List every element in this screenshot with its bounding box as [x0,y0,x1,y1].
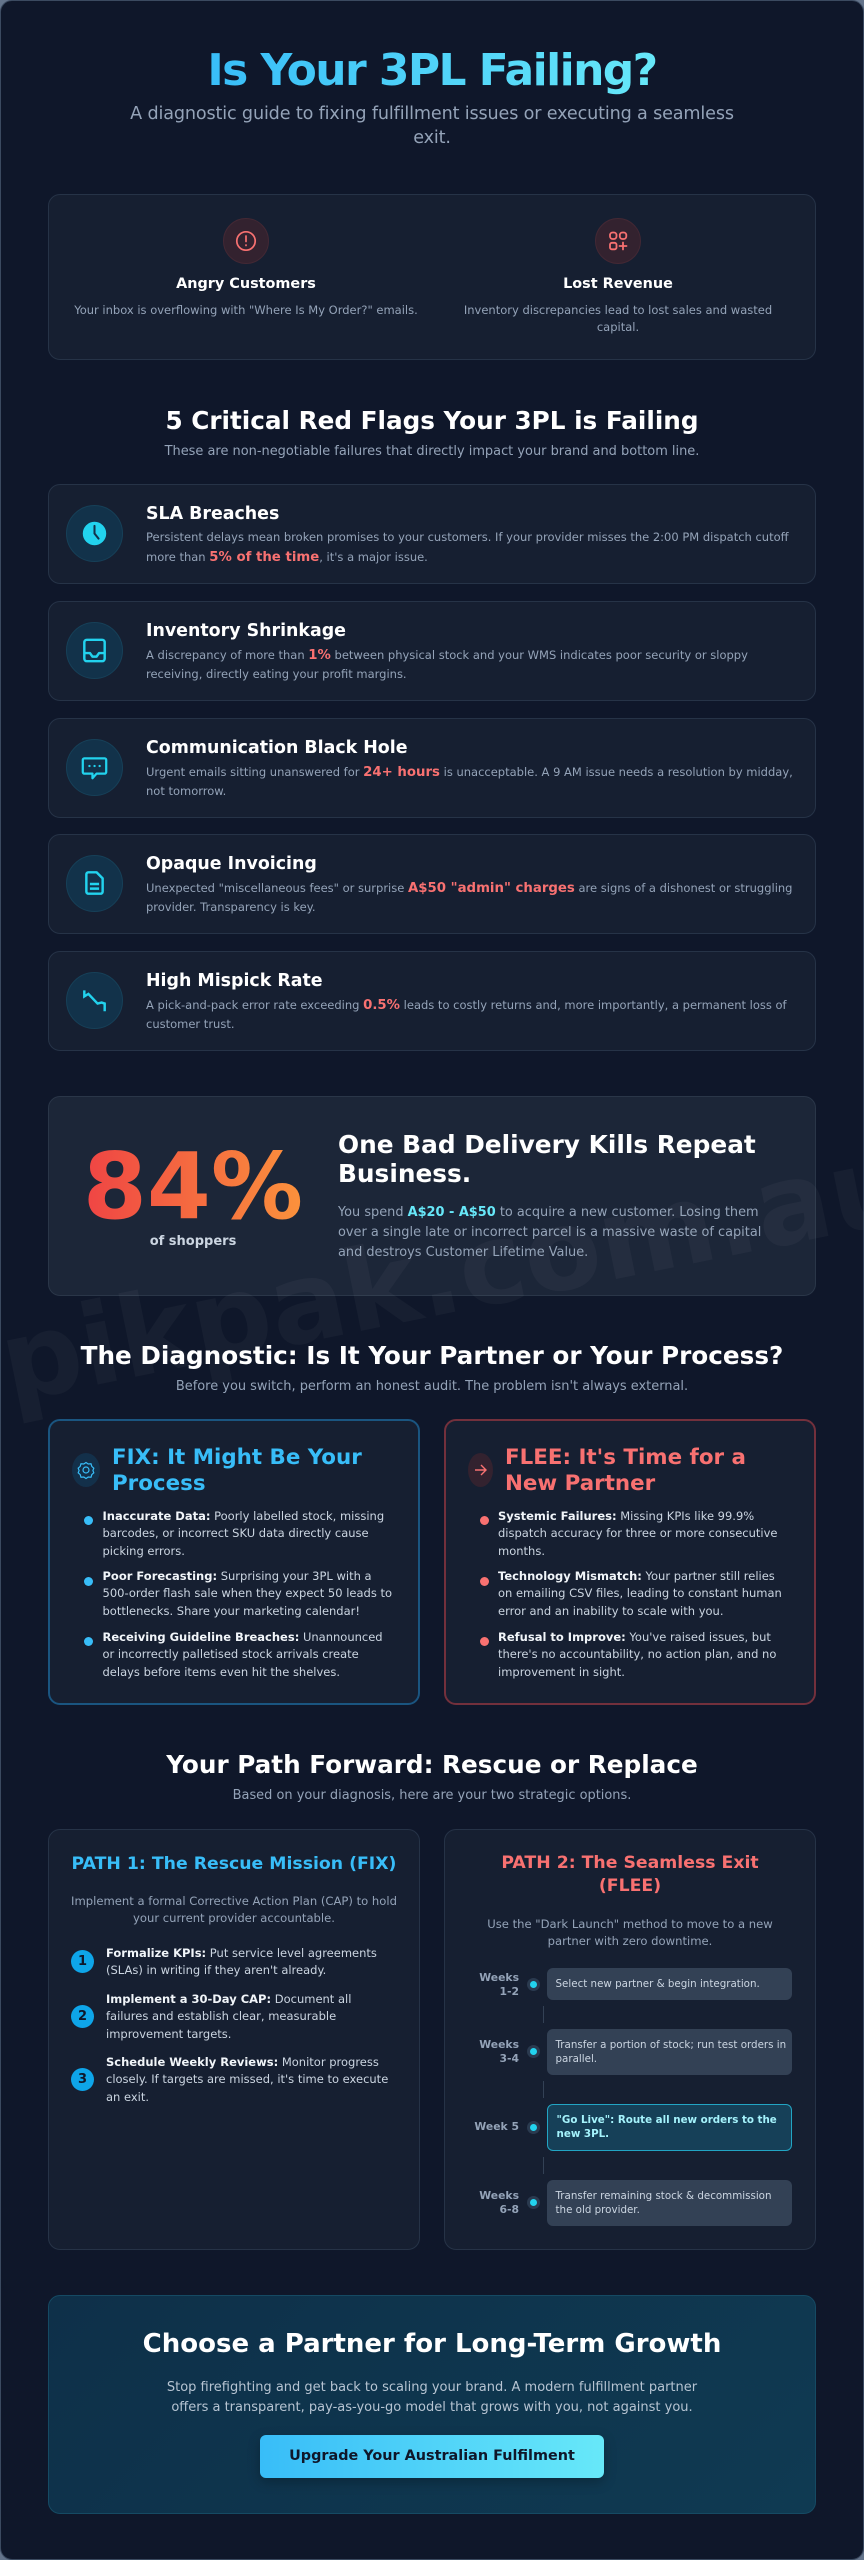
text: lost revenue: Inventory discrepancies lead to lost sales and wasted [464,303,772,317]
bullet: receiving guideline: or incorrectly palletised stock arrivals create [102,1647,359,1661]
bullet: systemic failures [498,1509,777,1558]
bullet: poor forecasting: 500-order flash sale when they expect 50 leads to [102,1586,392,1600]
label: weeks 3-4: 3-4 [499,2052,519,2065]
label: week 5: Week 5 [474,2120,519,2133]
heading: bad delivery: Business. [338,1159,471,1188]
text: communication black hole [146,765,793,798]
icon: shapes [595,218,641,264]
text: inventory shrinkage: A discrepancy of more than 1% between physical stock and your WMS indicates poor security or sloppy [146,648,748,663]
icon: alert circle [223,218,269,264]
bullet dot [480,1516,488,1525]
panel: high mispick rate [48,951,816,1051]
panel: consequences [48,194,816,360]
bullet: systemic failures: months. [498,1544,545,1558]
heading: bad delivery [338,1130,756,1188]
button: Upgrade Your Australian Fulfilment [289,2448,575,2464]
step 1 [71,1946,377,1977]
step: go live [547,2104,792,2151]
panel: path 1 [48,1829,420,2250]
step text: closely. If targets are missed, it's time to execute [106,2072,388,2086]
subtitle: exit. [413,128,451,148]
text: bad delivery [338,1205,761,1260]
heading: path forward: Your Path Forward: Rescue or Replace [166,1750,698,1779]
step number: 3 [78,2072,87,2087]
heading: opaque invoicing: Opaque Invoicing [146,854,317,874]
label: weeks 1-2: 1-2 [499,1985,519,1998]
text: communication black hole: not tomorrow. [146,784,226,798]
heading: inventory shrinkage: Inventory Shrinkage [146,621,346,641]
text: sla breaches [146,530,789,564]
title: Is Your 3PL Failing? [207,45,657,96]
bullet: systemic failures: dispatch accuracy for three or more consecutive [498,1526,777,1540]
heading: communication black hole: Communication Black Hole [146,738,408,758]
heading: flee [505,1445,746,1496]
bullet: inaccurate data: picking errors. [102,1544,185,1558]
text: path 1 intro: your current provider accountable. [133,1911,335,1925]
step text: Formalize KPIs: Put service level agreements [106,1946,377,1960]
step: transfer portion: parallel. [556,2053,597,2065]
heading: angry customers: Angry Customers [176,276,316,292]
bullet: poor forecasting: bottlenecks. Share your marketing calendar! [102,1604,360,1618]
panel: fix [48,1419,420,1705]
heading: path 2: (FLEE) [599,1876,661,1896]
bullet: technology mismatch: on emailing CSV files, leading to constant human [498,1586,782,1600]
text: high mispick rate: A pick-and-pack error rate exceeding 0.5% leads to costly returns and, more importantly, a permanent loss of [146,998,787,1013]
label: weeks 3-4 [479,2038,519,2065]
icon: chat bubble [66,739,123,796]
heading: fix: FIX: It Might Be Your [112,1445,362,1470]
step: decommission: the old provider. [556,2204,640,2216]
panel: sla breaches [48,484,816,584]
step number [71,1950,94,1972]
subheading: diagnostic: Before you switch, perform an honest audit. The problem isn't always external. [176,1379,688,1394]
text: inventory shrinkage [146,648,748,681]
text: bad delivery: You spend A$20 - A$50 to acquire a new customer. Losing them [338,1205,759,1220]
bullet dot [480,1637,488,1646]
heading: lost revenue: Lost Revenue [563,276,673,292]
bullet dot [84,1516,93,1525]
text: bad delivery: over a single late or incorrect parcel is a massive waste of capital [338,1225,761,1240]
heading: fix [112,1445,362,1496]
step: select partner: Select new partner & begin integration. [556,1978,760,1990]
text: path 1 intro: Implement a formal Corrective Action Plan (CAP) to hold [71,1894,397,1908]
bullet: systemic failures: Systemic Failures: Missing KPIs like 99.9% [498,1509,754,1523]
connector [543,2157,544,2174]
heading: diagnostic: The Diagnostic: Is It Your Partner or Your Process? [81,1341,783,1370]
step text: failures and establish clear, measurable [106,2009,336,2023]
text: lost revenue [464,303,772,334]
panel: opaque invoicing [48,834,816,934]
text: call to action: offers a transparent, pay-as-you-go model that grows with you, not against you. [171,2400,693,2415]
text: path 2 intro: Use the "Dark Launch" method to move to a new [487,1917,773,1931]
timeline [474,1968,792,2226]
bullet: refusal to improve: improvement in sight. [498,1665,625,1679]
bullet: refusal to improve: Refusal to Improve: You've raised issues, but [498,1630,771,1644]
step text [106,1992,351,2041]
step text: (SLAs) in writing if they aren't already. [106,1963,326,1977]
bullet: poor forecasting: Poor Forecasting: Surprising your 3PL with a [102,1569,372,1583]
bullet dot [84,1577,93,1586]
step: go live: new 3PL. [556,2128,609,2140]
text: high mispick rate: customer trust. [146,1017,234,1031]
button [260,2435,604,2478]
stat: 84 percent: 84% [83,1133,303,1240]
bullet list: fix [84,1509,392,1679]
bullet: receiving guideline [102,1630,383,1679]
subtitle: A diagnostic guide to fixing fulfillment issues or executing a seamless [130,104,734,124]
bullet: technology mismatch: Technology Mismatch: Your partner still relies [498,1569,775,1583]
panel: statistic [48,1096,816,1296]
bullet: inaccurate data: Inaccurate Data: Poorly labelled stock, missing [102,1509,384,1523]
panel: call to action [48,2295,816,2514]
label: weeks 3-4: Weeks [479,2038,519,2051]
text: path 2 intro: partner with zero downtime. [548,1934,712,1948]
step text: Implement a 30-Day CAP: Document all [106,1992,351,2006]
subheading: path forward: Based on your diagnosis, here are your two strategic options. [233,1788,631,1803]
panel: path 2 [444,1829,816,2250]
bullet: receiving guideline: delays before items even hit the shelves. [102,1665,340,1679]
bullet: refusal to improve: there's no accountability, no action plan, and no [498,1647,776,1661]
step 3 [71,2055,388,2104]
text: path 2 intro [487,1917,773,1948]
text: call to action: Stop firefighting and get back to scaling your brand. A modern fulfillment partner [167,2380,697,2395]
bullet list: flee [480,1509,782,1679]
bullet dot [480,1577,488,1586]
bullet: technology mismatch: error and an inability to scale with you. [498,1604,724,1618]
step: transfer portion: Transfer a portion of stock; run test orders in [556,2038,786,2050]
icon: gear [72,1453,100,1487]
timeline dot [530,2199,537,2206]
text: sla breaches: more than 5% of the time, it's a major issue. [146,550,428,564]
panel: communication black hole [48,718,816,818]
step number [71,2068,94,2091]
timeline dot [530,1981,537,1988]
text: communication black hole: Urgent emails sitting unanswered for 24+ hours is unacceptable. A 9 AM issue needs a resolution by midday, [146,765,793,780]
icon: clock [66,505,123,562]
step text [106,2055,388,2104]
step text: Schedule Weekly Reviews: Monitor progress [106,2055,379,2069]
heading: flee: New Partner [505,1471,655,1496]
heading: flee: FLEE: It's Time for a [505,1445,746,1470]
bullet: receiving guideline: Receiving Guideline Breaches: Unannounced [102,1630,383,1644]
heading: high mispick rate: High Mispick Rate [146,971,323,991]
text: path 1 intro [71,1894,397,1925]
timeline dot [530,2048,537,2055]
text: high mispick rate [146,998,787,1031]
text: sla breaches: Persistent delays mean broken promises to your customers. If your provider misses the 2:00 PM dispatch cutoff [146,530,789,544]
timeline dot [530,2124,537,2131]
text: angry customers: Your inbox is overflowing with "Where Is My Order?" emails. [74,303,418,317]
text: lost revenue: capital. [597,320,639,334]
panel: inventory shrinkage [48,601,816,701]
text: opaque invoicing: Unexpected "miscellaneous fees" or surprise A$50 "admin" charges are signs of a dishonest or struggling [146,881,792,896]
label: weeks 6-8: 6-8 [499,2203,519,2216]
connector [543,2006,544,2023]
label: weeks 6-8 [479,2189,519,2216]
connector [543,2081,544,2098]
step 2 [71,1992,351,2041]
text: inventory shrinkage: receiving, directly eating your profit margins. [146,667,407,681]
heading: fix: Process [112,1471,206,1496]
step text: an exit. [106,2090,149,2104]
text: call to action [167,2380,698,2415]
label: weeks 6-8: Weeks [479,2189,519,2202]
bullet dot [84,1637,93,1646]
heading: sla breaches: SLA Breaches [146,504,279,524]
icon: arrow [468,1453,493,1487]
step number: 1 [78,1954,87,1968]
panel: flee [444,1419,816,1705]
heading: bad delivery: One Bad Delivery Kills Repeat [338,1130,756,1159]
step text: improvement targets. [106,2027,231,2041]
heading: red flags: 5 Critical Red Flags Your 3PL is Failing [165,406,699,435]
step: decommission [547,2180,792,2226]
heading: path 2 [501,1853,759,1896]
subtitle [130,104,734,148]
step text [106,1946,377,1977]
heading: call to action: Choose a Partner for Long-Term Growth [143,2329,721,2359]
text: opaque invoicing: provider. Transparency is key. [146,900,316,914]
step: go live: "Go Live": Route all new orders to the [556,2114,777,2126]
icon: document [66,855,123,912]
bullet: inaccurate data [102,1509,384,1558]
step number: 2 [78,2008,87,2024]
text: bad delivery: and destroys Customer Lifetime Value. [338,1245,588,1260]
step: transfer portion [547,2029,792,2075]
heading: path 2: PATH 2: The Seamless Exit [501,1853,759,1873]
label: weeks 1-2: Weeks [479,1971,519,1984]
icon: trending down [66,972,123,1029]
icon: inbox tray [66,622,123,679]
bullet: technology mismatch [498,1569,782,1618]
step number [71,2004,94,2028]
subheading: red flags: These are non-negotiable failures that directly impact your brand and bottom line. [165,444,699,459]
bullet: inaccurate data: barcodes, or incorrect SKU data directly cause [102,1526,369,1540]
label: weeks 1-2 [479,1971,519,1998]
bullet: poor forecasting [102,1569,392,1618]
bullet: refusal to improve [498,1630,776,1679]
text: opaque invoicing [146,881,792,914]
step: select partner [547,1968,792,2000]
heading: path 1: PATH 1: The Rescue Mission (FIX) [72,1854,396,1874]
label: of shoppers: of shoppers [150,1234,236,1249]
step: decommission: Transfer remaining stock & decommission [556,2190,772,2202]
